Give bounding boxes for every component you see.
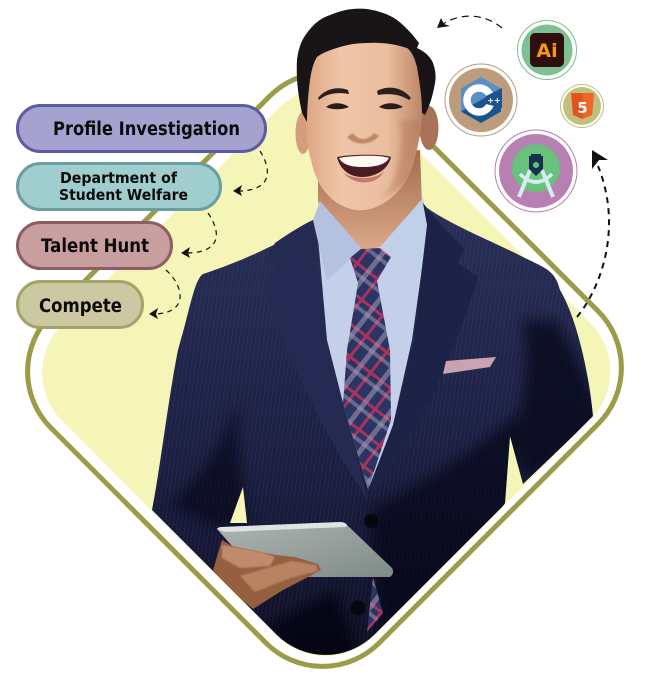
pill: Department of Student Welfare: [18, 164, 220, 210]
icon: C++: [445, 64, 517, 136]
man in suit with tablet: [152, 150, 593, 655]
left ear: [296, 112, 310, 154]
jaw shading: [380, 120, 420, 200]
tablet: [217, 522, 393, 577]
right collar: [380, 198, 424, 247]
icon: HTML5: 5: [577, 99, 588, 117]
pill: Talent Hunt: Talent Hunt: [41, 236, 149, 257]
pill: Department of Student Welfare: Student Welfare: [59, 186, 188, 204]
left eye: [326, 103, 349, 109]
shirt: [318, 222, 427, 490]
face: [306, 32, 423, 210]
left collar: [313, 201, 362, 280]
pill: Profile Investigation: [18, 106, 266, 152]
hair: [297, 9, 436, 122]
arrow: large curved upward: [577, 150, 609, 317]
suit jacket: [152, 207, 593, 655]
button upper: [364, 514, 378, 528]
pill: Compete: Compete: [39, 296, 122, 317]
arrow: talent hunt to compete: [149, 270, 180, 319]
lower lip: [343, 171, 384, 182]
icon: Adobe Illustrator: Ai: [536, 40, 558, 62]
icon: Android Studio: [495, 130, 577, 212]
neck: [318, 150, 422, 250]
right eye: [379, 103, 403, 109]
tie: [343, 248, 391, 490]
arrow: top curved: [437, 16, 502, 28]
button lower: [350, 600, 366, 616]
right ear: [420, 106, 438, 150]
pill: Compete: [18, 282, 142, 328]
right lapel: [370, 203, 478, 495]
pill: Talent Hunt: [18, 222, 172, 268]
smile: [337, 155, 391, 177]
icon: C++: ++: [487, 96, 501, 105]
arrow: department to talent hunt: [181, 213, 216, 258]
man head: [296, 9, 438, 210]
pocket square: [443, 357, 496, 374]
icon: Adobe Illustrator: [518, 20, 576, 80]
icon: HTML5: [560, 84, 604, 128]
sleeve gap: [230, 487, 247, 523]
left eyebrow: [318, 88, 349, 100]
right eyebrow: [377, 88, 411, 100]
nose shadow: [347, 133, 379, 144]
pill: Profile Investigation: Profile Investigation: [53, 119, 240, 140]
teeth: [339, 156, 389, 167]
pill: Department of Student Welfare: Department of: [60, 169, 177, 187]
left lapel: [263, 220, 368, 500]
hand: [213, 540, 321, 609]
arrow: profile to department: [233, 151, 267, 196]
